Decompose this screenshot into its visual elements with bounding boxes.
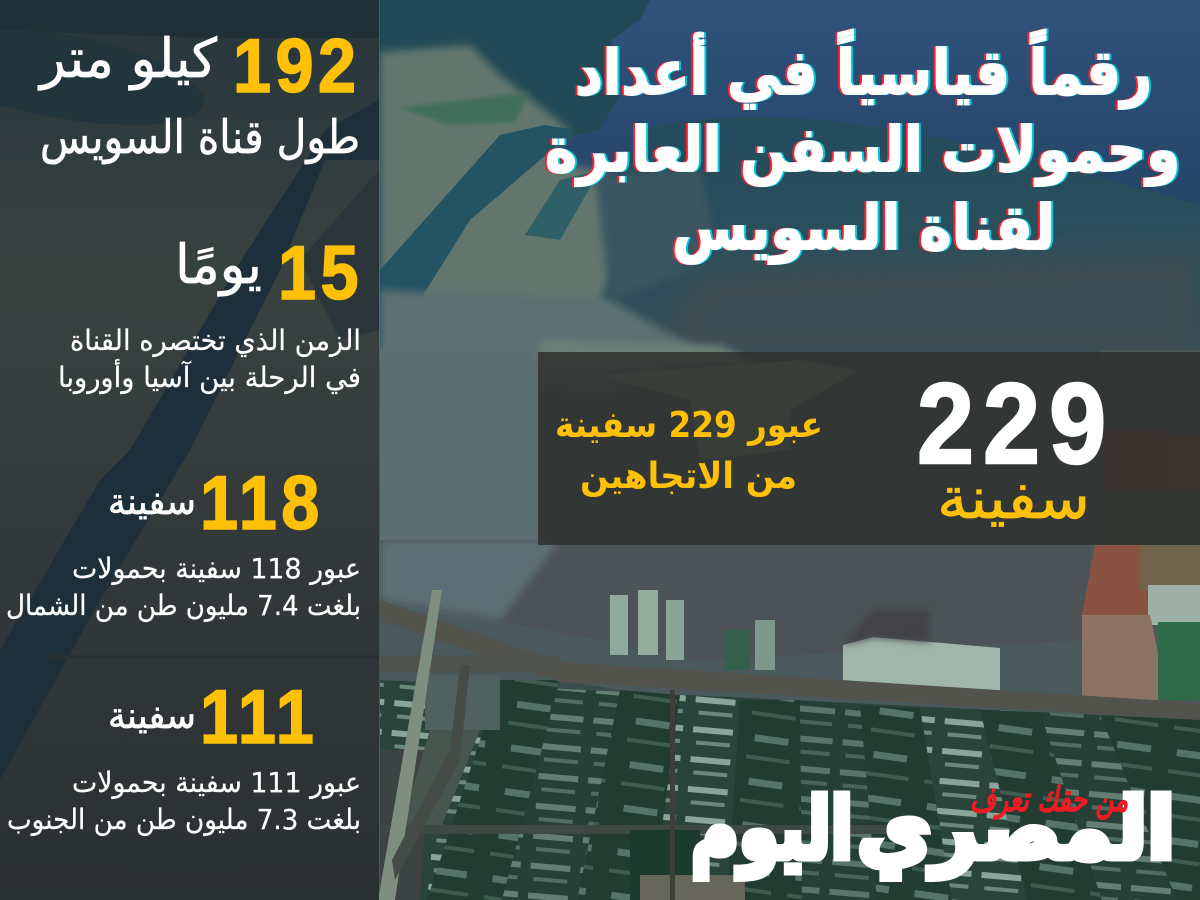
title (543, 28, 1182, 264)
unit: ships: سفينة (937, 464, 1090, 532)
panel: left statistics column (0, 0, 379, 900)
stat: 15 days heading: 15 (278, 232, 363, 316)
stat: 192 km heading: كيلو متر (37, 27, 217, 90)
callout description: عبور 229 سفينة (555, 405, 823, 446)
stat: 111 ships heading (108, 676, 317, 760)
stat: 118 ships heading: 118 (200, 462, 324, 546)
text: 118 ships description: عبور 118 سفينة بحمولات (72, 552, 361, 585)
text: 111 ships description: بلغت 7.3 مليون طن من الجنوب (7, 803, 361, 836)
stat: 15 days heading: يومًا (175, 233, 262, 296)
text: 15 days description (58, 324, 361, 394)
logo: Al-Masry Al-Youm: المصري (857, 780, 1175, 879)
big number 229: 229 (917, 360, 1115, 487)
text: 15 days description: في الرحلة بين آسيا وأوروبا (58, 358, 361, 394)
logo: Al-Masry Al-Youm: اليوم (691, 780, 853, 879)
stat: 192 km heading (37, 25, 361, 109)
text: 118 ships description (6, 552, 361, 622)
text: 111 ships description (7, 766, 361, 836)
logo: Al-Masry Al-Youm (691, 780, 1175, 879)
stat: 111 ships heading: 111 (200, 676, 317, 760)
stat: 118 ships heading: سفينة (108, 482, 196, 523)
stat: 15 days heading (175, 232, 363, 316)
stat: 192 km heading: 192 (233, 25, 361, 109)
text: 15 days description: الزمن الذي تختصره القناة (70, 324, 361, 357)
title: لقناة السويس (674, 191, 1057, 264)
callout description: من الاتجاهين (580, 456, 797, 497)
title: لقناة السويس (670, 191, 1053, 264)
text: 111 ships description: عبور 111 سفينة بحمولات (72, 766, 361, 799)
title: لقناة السويس (672, 191, 1055, 264)
stat: 118 ships heading (108, 462, 324, 546)
panel: 229 ships callout (538, 352, 1200, 545)
text: 118 ships description: بلغت 7.4 مليون طن من الشمال (6, 589, 361, 622)
stat: canal length caption: طول قناة السويس (40, 110, 360, 165)
decorative under-panel patches (600, 360, 860, 460)
stat: 111 ships heading: سفينة (108, 696, 196, 737)
callout description (555, 405, 823, 497)
logo tagline: من حقك تعرف (970, 780, 1128, 820)
